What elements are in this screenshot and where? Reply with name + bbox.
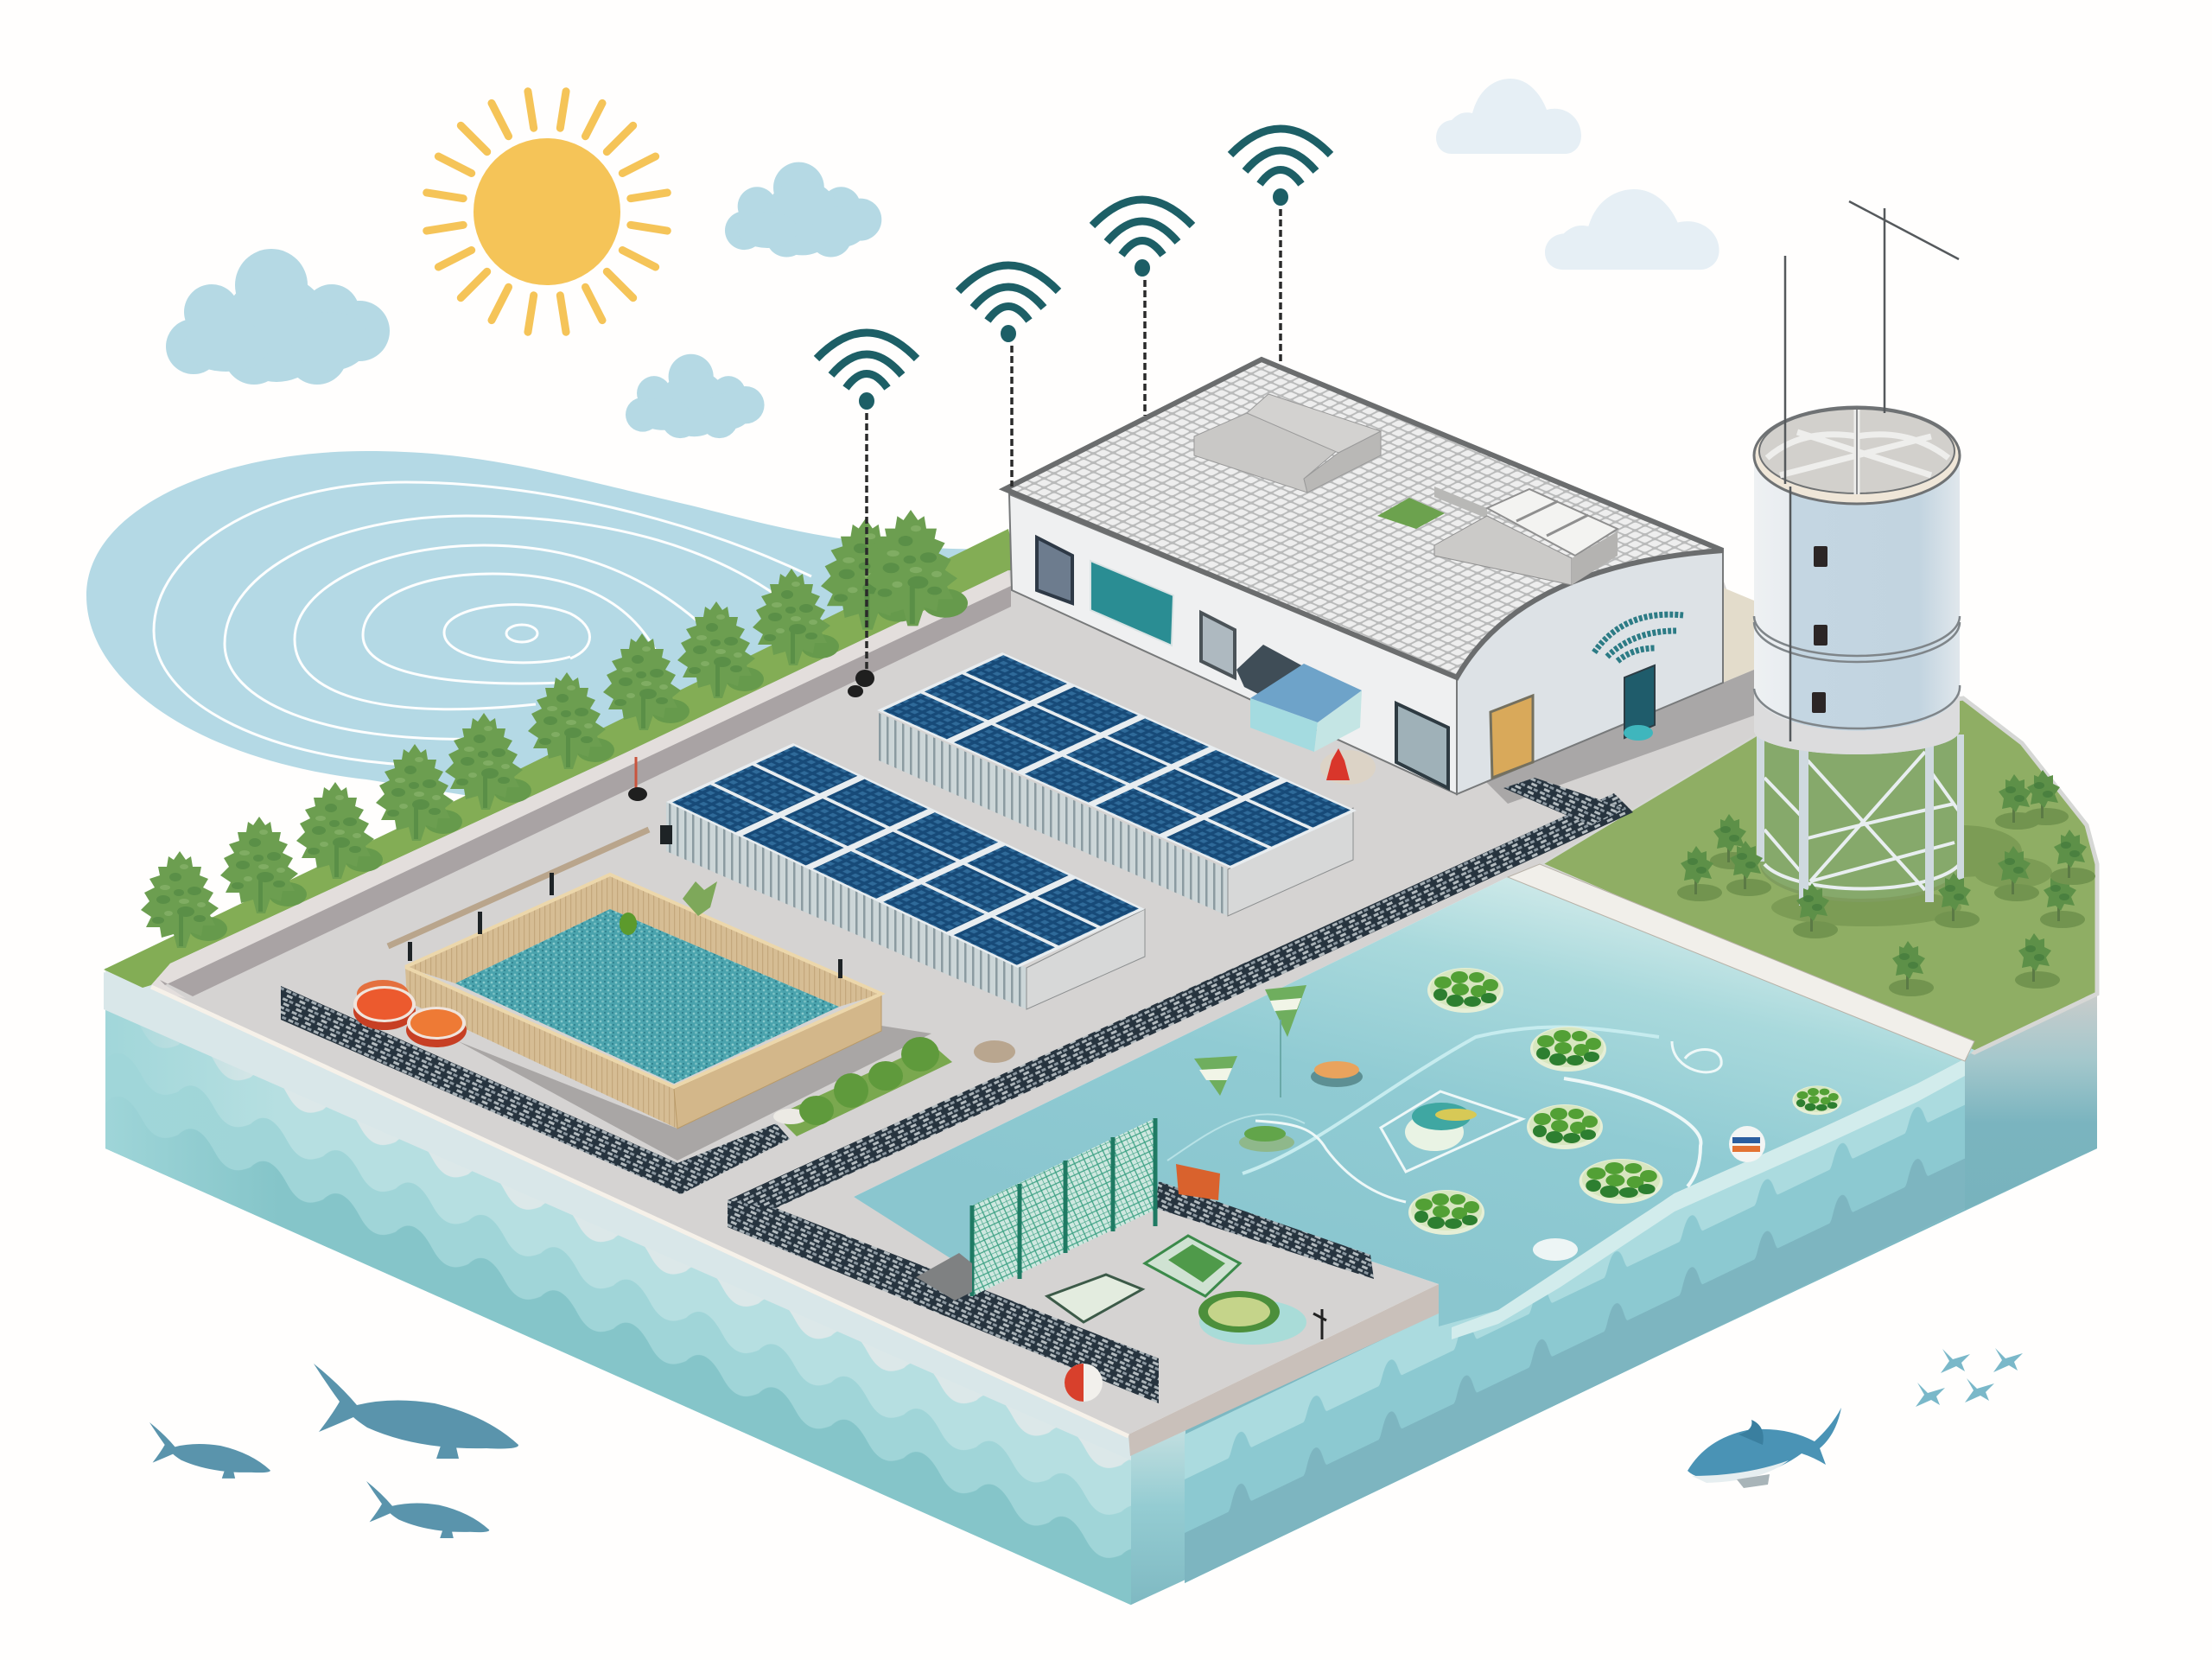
fish tank shadow — [458, 1026, 931, 1161]
wifi signal 3 — [1092, 200, 1192, 416]
gable door — [1491, 696, 1533, 778]
tiled roof — [1005, 359, 1723, 677]
fish: large — [314, 1364, 518, 1459]
green roof patch — [1377, 498, 1445, 529]
capsule device — [974, 1040, 1015, 1063]
work item: round basin — [1198, 1291, 1306, 1345]
left grass strip — [104, 529, 1020, 988]
antennas — [1785, 201, 1959, 741]
blue kiosk — [1250, 664, 1362, 752]
water basin — [854, 864, 1974, 1326]
water current lines — [1167, 1027, 1721, 1202]
tower bands — [1754, 616, 1960, 728]
central sensor pad — [1381, 1091, 1522, 1172]
cloud: large left — [166, 249, 390, 385]
work item: tool — [1313, 1309, 1326, 1339]
block: right water face — [1131, 994, 2097, 1605]
orange box — [1176, 1164, 1220, 1200]
wooden fish tank — [405, 875, 881, 1129]
planting bed — [773, 1037, 952, 1136]
window: right — [1396, 703, 1448, 788]
concrete light kerb — [151, 570, 1011, 998]
cloud: upper middle — [725, 162, 881, 258]
floating plants — [1408, 968, 1842, 1235]
window: middle — [1201, 613, 1235, 677]
dark awning — [1236, 645, 1305, 700]
basin surf edge — [1452, 1059, 1965, 1339]
building front wall — [1009, 494, 1457, 794]
roof unit: white panels — [1434, 487, 1618, 556]
red buoy on pad — [1320, 748, 1376, 785]
cone buoys — [1194, 985, 1306, 1097]
window: teal — [1090, 561, 1173, 646]
work platform front edge — [1128, 1284, 1439, 1456]
roof unit: front — [1434, 516, 1618, 585]
tower lattice base — [1757, 735, 1964, 906]
multicolour buoy — [1729, 1126, 1765, 1162]
tower cylinder — [1754, 455, 1960, 754]
cloud: pale right — [1545, 189, 1719, 270]
gable entry door — [1624, 665, 1655, 741]
tank sensors — [408, 825, 842, 978]
work item: seedling tray — [1145, 1236, 1240, 1296]
fish: small left — [149, 1422, 270, 1479]
wifi sign on gable — [1594, 614, 1683, 661]
white float cluster — [1533, 1238, 1578, 1261]
water tower — [1754, 201, 1964, 906]
gabion wall: by platform — [1155, 1181, 1374, 1279]
block: left water face — [105, 968, 1131, 1605]
cloud: lower middle — [626, 354, 765, 438]
fish: small middle — [366, 1481, 489, 1538]
small boats — [1239, 1061, 1363, 1152]
roof unit: rear — [1194, 394, 1381, 493]
dark ramp — [916, 1253, 972, 1301]
wifi signal 1 — [817, 333, 917, 672]
pole marker — [628, 757, 647, 801]
road sensor — [848, 670, 874, 697]
wifi signal 2 — [958, 265, 1058, 487]
shark — [1688, 1408, 1841, 1488]
gabion wall: long diagonal — [728, 793, 1633, 1227]
tan ground behind gable — [1723, 588, 1754, 683]
work item: flat tray — [1047, 1275, 1142, 1322]
basin white seawall — [1508, 864, 1974, 1061]
fence net — [972, 1118, 1155, 1296]
shaded ground by gable — [1486, 670, 1754, 804]
wifi signal 4 — [1230, 129, 1331, 365]
tower portholes — [1812, 546, 1827, 713]
building gable wall — [1457, 550, 1723, 794]
tiny fish school — [1916, 1348, 2023, 1407]
red corner buoy — [1065, 1364, 1103, 1402]
yard front edge line — [151, 987, 1128, 1436]
cloud: pale top right — [1436, 79, 1581, 154]
gabion wall: around tank — [281, 986, 790, 1194]
concrete yard — [151, 570, 1763, 1434]
tower lower ring — [1754, 687, 1960, 754]
small shrub — [683, 881, 717, 916]
perimeter road — [160, 586, 1011, 996]
tower top rim — [1754, 407, 1960, 504]
right grass field — [1540, 698, 2097, 1053]
block: left face top band — [104, 972, 1131, 1460]
sun — [427, 92, 667, 332]
solar array: rear — [877, 652, 1357, 916]
solar array: front — [666, 743, 1145, 1009]
small trees on right field — [1677, 770, 2095, 996]
tree row — [141, 510, 968, 948]
gabion wall: by building — [1503, 778, 1624, 825]
distant lake with ripples — [86, 451, 1020, 804]
tower ground shadows — [1771, 825, 2052, 926]
red feed tubs — [353, 980, 467, 1047]
gabion wall: lower arm — [728, 1200, 1159, 1403]
window: left — [1037, 537, 1072, 603]
overhead pipe rail — [388, 830, 649, 946]
